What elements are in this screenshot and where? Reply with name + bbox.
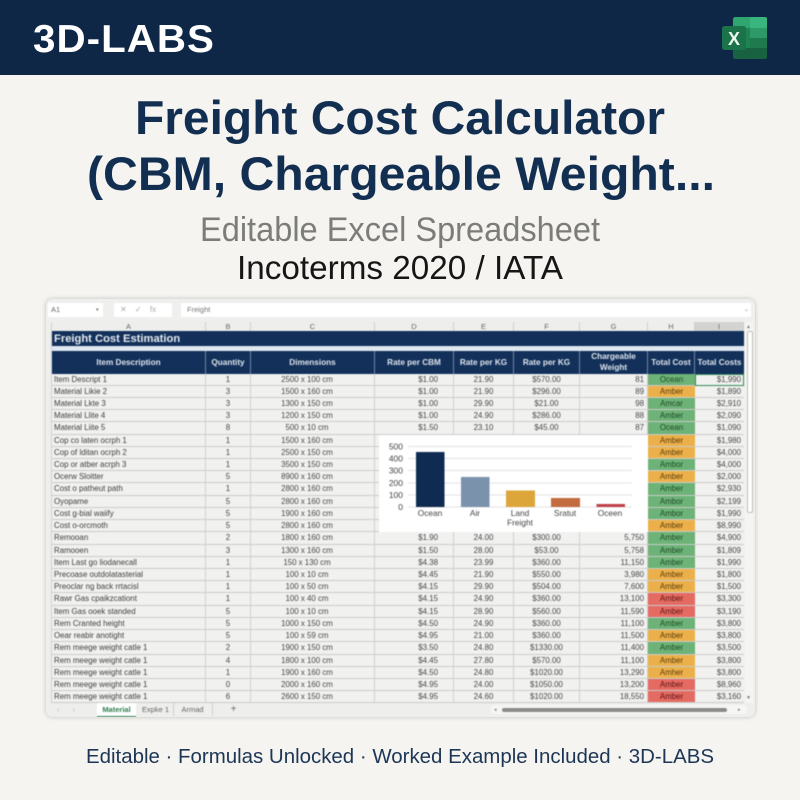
table rows: 3500 x 150 cm [281,460,333,469]
table rows: $1.00 [418,387,438,396]
table rows: $4.45 [418,570,438,579]
table rows: 87 [635,423,644,432]
formula bar: ⌄ [744,307,749,313]
table rows: $45.00 [534,423,559,432]
panel: spreadsheet window: Chargeable [591,352,636,361]
table rows: Rem meege weight catle 1 [54,643,147,652]
table rows: 28.00 [474,546,493,555]
table rows: 1300 x 160 cm [281,546,333,555]
panel: spreadsheet window: E [481,322,486,331]
tab: expke [138,703,174,716]
chart category labels: Land [511,508,530,518]
horizontal scrollbar: ▸ [738,707,741,713]
table rows: 150 x 130 cm [283,558,331,567]
table rows: $1.90 [418,533,438,542]
table rows: 100 x 40 cm [286,594,328,603]
tab: add sheet: + [231,704,236,715]
chart y axis labels: 200 [389,478,403,488]
table rows: Item Gas ooek standed [54,607,136,616]
table rows: $3,160 [717,692,741,701]
table rows: Remooan [54,533,88,542]
table rows: $300.00 [532,533,561,542]
table rows: 5 [226,619,230,628]
table rows: 3 [226,399,230,408]
table rows: 1800 x 100 cm [281,656,333,665]
table rows: 2600 x 150 cm [281,692,333,701]
table rows: Amber [660,546,683,555]
table rows: $360.00 [532,558,561,567]
table rows: 18,550 [620,692,644,701]
table header [51,350,745,375]
table rows: $560.00 [532,607,561,616]
table rows: 8900 x 160 cm [281,472,333,481]
table rows: 100 x 50 cm [286,582,328,591]
table rows: $1050.00 [530,680,563,689]
table rows: $2,000 [717,472,741,481]
chart y axis labels: 300 [389,466,403,476]
table rows: Amber [660,619,683,628]
table rows: Amcar [660,399,683,408]
table rows: $1,809 [717,546,741,555]
table rows: 3 [226,411,230,420]
panel: spreadsheet window: I [718,322,720,331]
table rows: 2800 x 160 cm [281,484,333,493]
table rows: Amber [660,521,683,530]
table rows: 13,100 [620,594,644,603]
panel: spreadsheet window: Rate per KG [523,358,570,367]
table rows: 1 [226,558,230,567]
table rows: 8 [226,423,230,432]
chart y axis labels: 500 [389,442,403,452]
table rows: $4.50 [418,668,438,677]
formula bar: Freight [187,305,210,314]
panel: spreadsheet window: Quantity [211,358,245,367]
table rows: 23.99 [474,558,493,567]
table rows: Cost g-bial waiify [54,509,114,518]
table rows: 24.80 [474,643,493,652]
panel: spreadsheet window: Rate per KG [460,358,507,367]
chart category labels: Oceen [598,508,623,518]
table rows: 5 [226,497,230,506]
table rows: 1500 x 160 cm [281,387,333,396]
icon: excel: X [728,29,740,49]
tab: material [97,703,136,717]
table rows: 2500 x 150 cm [281,448,333,457]
table rows: Oyopame [54,497,88,506]
chart category labels: Freight [507,518,534,528]
panel: spreadsheet window: Total Cost [651,358,691,367]
table rows: Amber [660,643,683,652]
table rows: 1 [226,436,230,445]
table rows: 11,100 [620,619,644,628]
table rows: 28.90 [474,607,493,616]
table rows: 81 [635,374,644,384]
table rows: $8,960 [717,680,741,689]
table rows: 1 [226,582,230,591]
table rows [52,373,744,704]
panel: spreadsheet window: B [225,322,230,331]
chart y axis labels [389,442,403,512]
table rows: 1900 x 150 cm [281,643,333,652]
table rows: $1,800 [717,570,741,579]
table rows: 1500 x 160 cm [281,436,333,445]
table rows: Item Last go liodanecall [54,558,137,567]
table rows: Amber [660,594,683,603]
table rows: $4,900 [717,533,741,542]
table rows: 27.80 [474,656,493,665]
title [87,91,715,200]
table rows: Amber [660,582,683,591]
table rows: 5 [226,509,230,518]
formula bar: ▾ [96,307,99,313]
title and subtitles [87,91,715,286]
panel: spreadsheet window: H [668,322,674,331]
table rows: Cost o patheut path [54,484,123,493]
table rows: $4.45 [418,656,438,665]
footer text: Editable · Formulas Unlocked · Worked Example Included · 3D-LABS [86,746,714,768]
table rows: 3,980 [624,570,644,579]
table rows: $3,800 [717,631,741,640]
formula bar: ✕ ✓ fx [120,305,156,314]
table rows: $2,090 [717,411,741,420]
table rows: 11,100 [620,656,644,665]
table rows: 2800 x 160 cm [281,521,333,530]
table rows: $1,990 [717,509,741,518]
table rows: 2000 x 160 cm [281,680,333,689]
subtitle: incoterms: Incoterms 2020 / IATA [237,249,563,286]
table rows: Amber [660,631,683,640]
chart y axis labels: 400 [389,454,403,464]
table rows: Amber [660,607,683,616]
table rows: $296.00 [532,387,561,396]
table rows: Amber [660,436,683,445]
table rows: 5 [226,607,230,616]
table rows: 24.60 [474,692,493,701]
vertical scrollbar [745,322,753,703]
table rows: Ocerw Sloitter [54,472,104,481]
table rows: 5,758 [624,546,644,555]
subtitle: editable excel spreadsheet: Editable Excel Spreadsheet [200,211,601,249]
table rows: 100 x 10 cm [286,607,328,616]
table rows: 2500 x 100 cm [281,374,333,384]
table rows: 21.90 [474,374,493,384]
table rows: 89 [635,387,644,396]
table rows: $3,800 [717,668,741,677]
table rows: $4.95 [418,692,438,701]
chart category labels: Sratut [554,508,577,518]
table rows: 21.90 [474,570,493,579]
table rows: 21.90 [474,387,493,396]
table rows: $4.15 [418,594,438,603]
table rows: 13,200 [620,680,644,689]
table rows: $1020.00 [530,692,563,701]
table rows: $4.95 [418,631,438,640]
table rows: Cop or atber acrph 3 [54,460,126,469]
table rows: $360.00 [532,594,561,603]
table rows: Material Llite 4 [54,411,105,420]
sheet title: freight cost estimation: Freight Cost Estimation [54,333,180,345]
table rows: $3,190 [717,607,741,616]
title: (CBM, Chargeable Weight... [87,147,715,200]
table rows: 1 [226,460,230,469]
selected cell outline [695,374,744,386]
table rows: Amber [660,411,683,420]
table rows: 0 [226,680,230,689]
table rows: $1,980 [717,436,741,445]
table rows: 1800 x 160 cm [281,533,333,542]
table rows: $570.00 [532,656,561,665]
table rows: 4 [226,656,230,665]
table rows: Item Descript 1 [54,374,107,384]
table rows: Amber [660,680,683,689]
table rows: $1,500 [717,582,741,591]
table rows: Amber [660,533,683,542]
bar chart [378,434,648,532]
table rows: Amber [660,558,683,567]
table rows: $21.00 [534,399,559,408]
table rows: Ambor [660,460,683,469]
horizontal scrollbar [491,705,747,714]
table rows: Rem meege weight catle 1 [54,656,147,665]
table rows: $2,910 [717,399,741,408]
panel: spreadsheet window: Rate per CBM [387,358,441,367]
brand logo text: 3D-LABS [33,18,215,61]
table rows: $1.50 [418,546,438,555]
table rows: $4.95 [418,680,438,689]
table rows: 11,590 [620,607,644,616]
table rows: Material Liite 5 [54,423,105,432]
table rows: 1900 x 160 cm [281,509,333,518]
table rows: 23.10 [474,423,493,432]
table rows: $8,990 [717,521,741,530]
table rows: 24.90 [474,411,493,420]
tab: material: Material [102,705,131,714]
sheet title: freight cost estimation [52,331,744,346]
chart bars [416,452,625,507]
table rows: $4.15 [418,582,438,591]
table rows: $570.00 [532,374,561,384]
table rows: Ramooen [54,546,88,555]
table rows: Precoase outdolatasterial [54,570,143,579]
table rows: $286.00 [532,411,561,420]
table rows: 6 [226,692,230,701]
table rows: Rem Cranted height [54,619,125,628]
table rows: 500 x 10 cm [286,423,328,432]
chart category labels: Ocean [418,508,443,518]
table rows: 2 [226,533,230,542]
table rows: $1.00 [418,374,438,384]
table rows: 24.90 [474,619,493,628]
table rows: Ambor [660,497,683,506]
table rows: $4,000 [717,448,741,457]
table rows: Ambor [660,509,683,518]
table rows: 21.00 [474,631,493,640]
table rows: $4.15 [418,607,438,616]
table rows: Cop of lditan ocrph 2 [54,448,127,457]
table rows: 24.80 [474,668,493,677]
table rows: Amber [660,472,683,481]
table rows: 13,290 [620,668,644,677]
formula bar [48,303,751,317]
table rows: 11,400 [620,643,644,652]
table rows: Oear reabir anotight [54,631,124,640]
column letters [126,322,744,332]
table rows: Amber [660,570,683,579]
table rows: 5 [226,521,230,530]
table rows: $4.38 [418,558,438,567]
table rows: $2,930 [717,484,741,493]
table rows: $1330.00 [530,643,563,652]
table rows: $360.00 [532,619,561,628]
table rows: $1020.00 [530,668,563,677]
row number gutter [46,322,52,703]
table rows: 29.90 [474,582,493,591]
panel: spreadsheet window: A [126,322,131,331]
header bar [0,0,800,75]
table rows: 24.00 [474,680,493,689]
chart y axis labels: 100 [389,490,403,500]
table rows: $3,800 [717,656,741,665]
panel: spreadsheet window: Total Costs [698,358,741,367]
table rows: 5 [226,631,230,640]
tab: arrows: ‹ › [57,705,75,714]
table rows: $1,990 [717,558,741,567]
panel: spreadsheet window [46,299,755,717]
tab: armad [173,703,213,716]
table rows: $3.50 [418,643,438,652]
chart category labels: Air [470,508,480,518]
table rows: 3 [226,387,230,396]
table rows: 11,150 [620,558,644,567]
vertical scrollbar: ▲ [746,324,751,330]
table rows: 1 [226,668,230,677]
table rows: 1 [226,570,230,579]
table rows: 88 [635,411,644,420]
spacer row [52,346,744,351]
table rows: Rem meege weight catle 1 [54,680,147,689]
chart category labels [418,508,623,528]
panel: spreadsheet window: D [411,322,417,331]
table rows: Cop co laten ocrph 1 [54,436,127,445]
tab: expke: Expke 1 [142,705,169,714]
table rows: 2 [226,643,230,652]
table rows: 5 [226,472,230,481]
table rows: 24.00 [474,533,493,542]
table rows: Amber [660,656,683,665]
horizontal scrollbar: ◂ [494,707,497,713]
table rows: $2,199 [717,497,741,506]
sheet tabs bar [46,703,755,717]
table rows: $1.00 [418,399,438,408]
table rows: $53.00 [534,546,559,555]
table rows: Material Lkte 3 [54,399,106,408]
table rows: 1200 x 150 cm [281,411,333,420]
table rows: 1 [226,448,230,457]
table rows: $3,300 [717,594,741,603]
table rows: $4,000 [717,460,741,469]
table rows: $3,500 [717,643,741,652]
table rows: 1 [226,484,230,493]
table rows: 29.90 [474,399,493,408]
table rows: Amber [660,484,683,493]
chart y axis labels: 0 [398,502,403,512]
table rows: 1 [226,594,230,603]
table rows: 1300 x 150 cm [281,399,333,408]
tab: armad: Armad [181,705,204,714]
table rows: $504.00 [532,582,561,591]
table rows: Rem meege weight catle 1 [54,668,147,677]
vertical scrollbar: ▼ [746,695,751,701]
table rows: 100 x 59 cm [286,631,328,640]
table rows: $1.50 [418,423,438,432]
table rows: $1,990 [717,374,741,384]
table rows: $1.00 [418,411,438,420]
table rows: 98 [635,399,644,408]
table rows: $360.00 [532,631,561,640]
table rows: $4.50 [418,619,438,628]
title: Freight Cost Calculator [135,91,665,144]
panel: spreadsheet window: Weight [600,363,627,372]
table rows: 7,600 [624,582,644,591]
icon: excel [722,17,767,59]
table rows: Amber [660,387,683,396]
table rows: Amber [660,448,683,457]
panel: spreadsheet window: C [310,322,315,331]
table rows: Amher [660,668,683,677]
table rows: Amber [660,692,683,701]
table rows: 1900 x 160 cm [281,668,333,677]
table rows: $550.00 [532,570,561,579]
table rows: 11,500 [620,631,644,640]
table rows: 1 [226,374,230,384]
table rows: Rawr Gas cpaikzcationt [54,594,137,603]
table rows: Ocean [660,374,683,384]
table rows: Cost o-orcmoth [54,521,108,530]
table rows: $3,800 [717,619,741,628]
panel: spreadsheet window: Dimensions [289,358,336,367]
table rows: Preoclar ng back rrtacisl [54,582,139,591]
table rows: 3 [226,546,230,555]
table rows: 5,750 [624,533,644,542]
panel: spreadsheet window: F [544,322,549,331]
table rows: Rem meege weight catle 1 [54,692,147,701]
table rows: 100 x 10 cm [286,570,328,579]
table rows: Material Likie 2 [54,387,107,396]
table rows: $1,890 [717,387,741,396]
table rows: 2800 x 160 cm [281,497,333,506]
table rows: 1000 x 150 cm [281,619,333,628]
table rows: 24.90 [474,594,493,603]
panel: spreadsheet window: Item Description [96,358,161,367]
table rows: $1,090 [717,423,741,432]
table rows: Ocean [660,423,683,432]
formula bar: A1 [51,305,60,314]
panel: spreadsheet window: G [611,322,616,331]
